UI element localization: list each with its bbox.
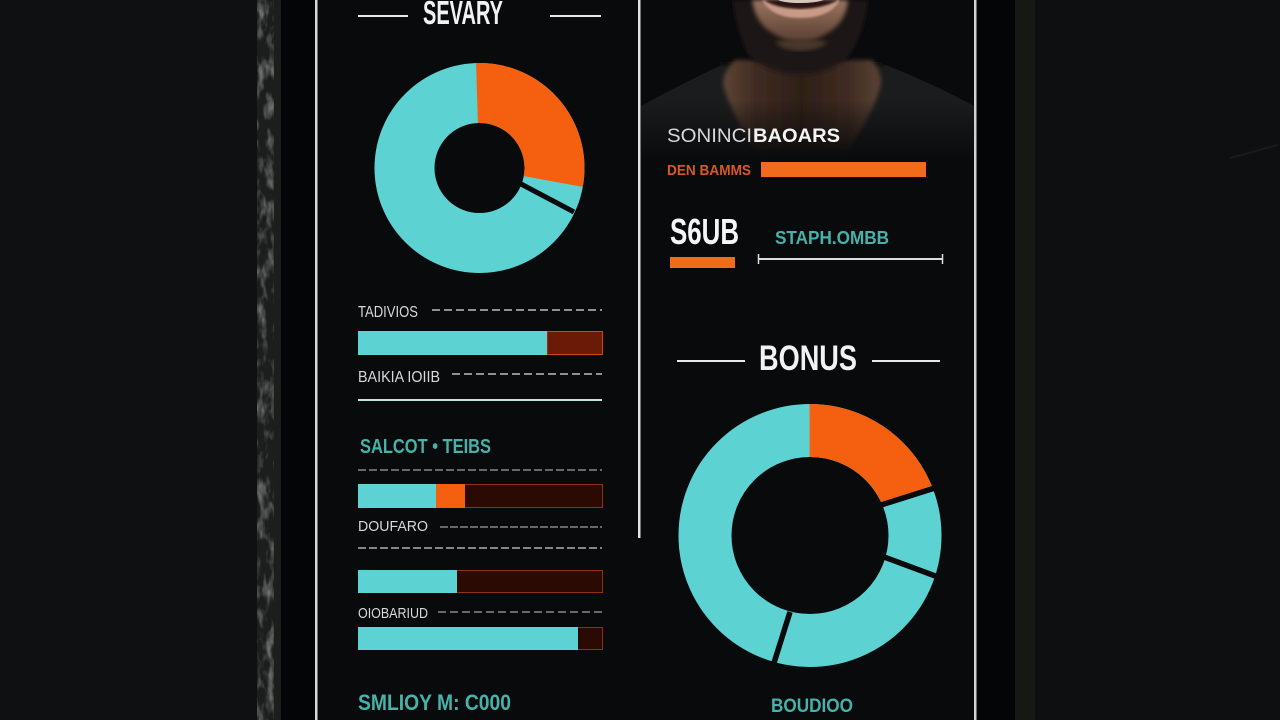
- caption: bonus total: BOUDIOO: [771, 696, 853, 717]
- label: row one: TADIVIOS: [358, 304, 418, 321]
- stat: orange progress: [667, 162, 926, 179]
- text block: name: SONINCI: [667, 126, 752, 147]
- bar: tier two: [358, 570, 602, 593]
- panel: infographic board: [281, 0, 1015, 720]
- stat: teal label with range line: STAPH.OMBB: [775, 228, 889, 248]
- bar group: salary breakdown: [358, 304, 603, 400]
- portrait: smiling man in dark shirt: [641, 0, 974, 161]
- stat: orange progress: DEN BAMMS: [667, 162, 751, 179]
- caption: salary total: SMLIOY M: C000: [358, 690, 511, 715]
- text block: name: BAOARS: [753, 126, 840, 147]
- bar: tier one: [358, 484, 602, 508]
- frame lines: [315, 0, 976, 720]
- label: tier three: OIOBARIUD: [358, 605, 428, 622]
- bar: tier three: [358, 627, 602, 650]
- label: tier two: DOUFARO: [358, 518, 428, 535]
- donut chart: salary: [403, 91, 574, 245]
- donut chart: bonus: [705, 430, 938, 666]
- text block: name: [667, 126, 840, 147]
- label: row two: BAIKIA IOIIB: [358, 369, 440, 386]
- bar: row one: [358, 331, 603, 355]
- heading: Bonus: BONUS: [759, 339, 857, 378]
- bar group: salary tiers: [358, 484, 602, 650]
- stat: big value: [670, 211, 739, 268]
- stat: big value: S6UB: [670, 211, 739, 252]
- subheading: salary tiers: SALCOT • TEIBS: [360, 436, 491, 458]
